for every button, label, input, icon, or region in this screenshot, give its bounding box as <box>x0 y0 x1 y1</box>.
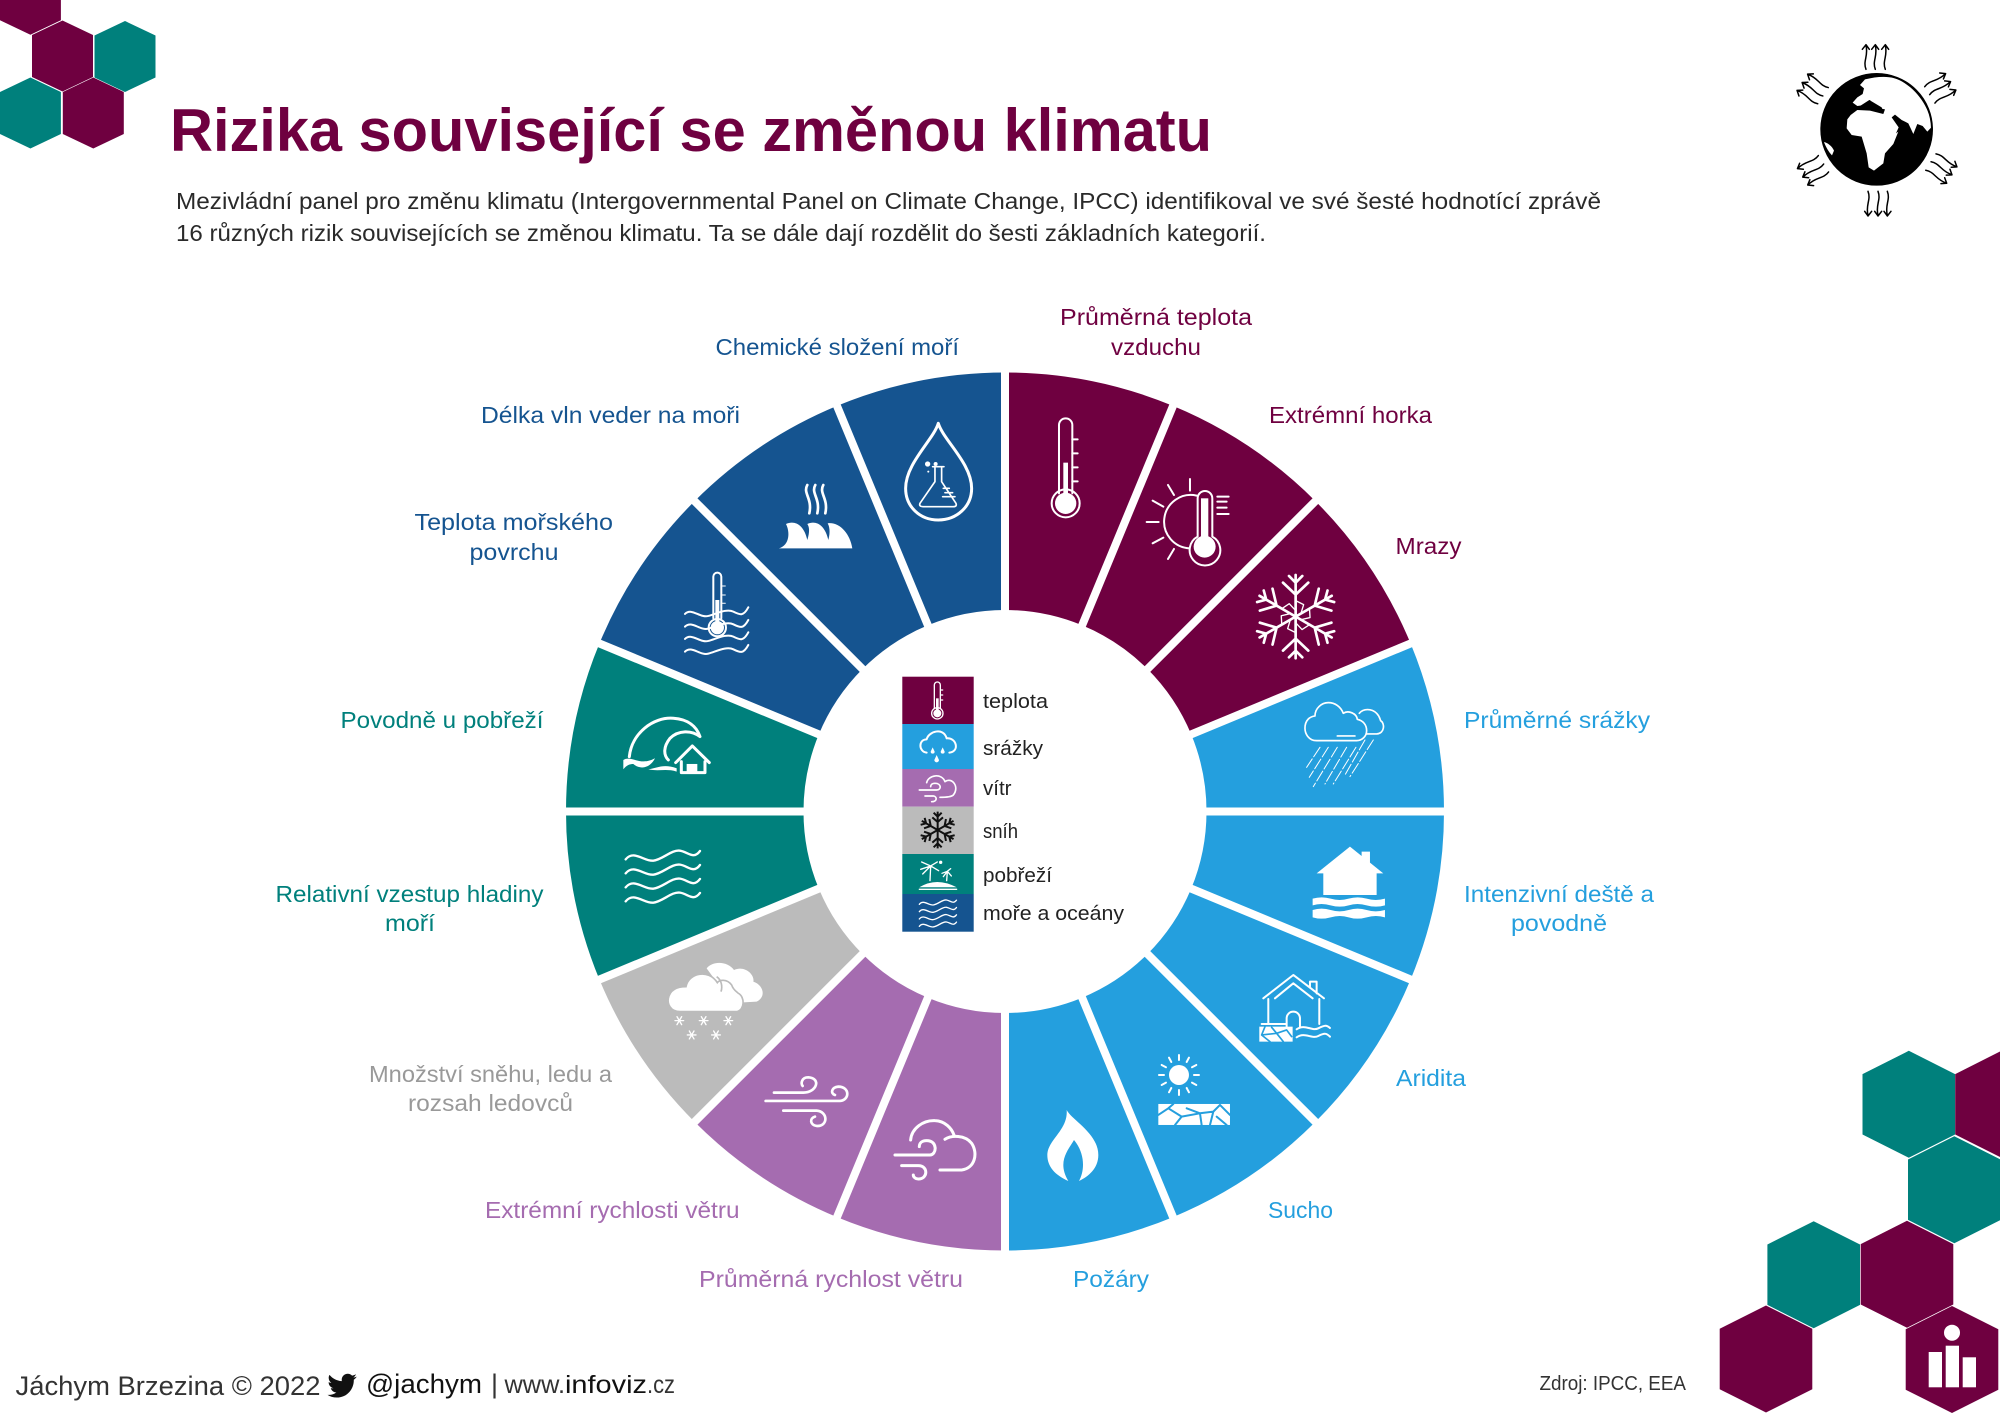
icon: twitter bird <box>328 1374 357 1398</box>
legend row: moře a oceány: moře a oceány <box>983 903 1124 925</box>
label: průměrná teplota vzduchu: vzduchu <box>1111 334 1201 360</box>
legend row: pobřeží: pobřeží <box>983 865 1052 887</box>
segment: aridita <box>1148 889 1411 1122</box>
label: průměrná teplota vzduchu <box>1060 304 1252 360</box>
legend row: vítr <box>902 769 1012 807</box>
label: mrazy: Mrazy <box>1396 533 1462 559</box>
segment: extrémní horka <box>1082 406 1315 669</box>
label: množství sněhu, ledu a rozsah ledovců <box>369 1061 612 1116</box>
icon: infoviz logo <box>1929 1325 1976 1387</box>
icon: sun over cracked soil <box>1158 1055 1230 1125</box>
icon: wind <box>766 1077 847 1126</box>
footer credits: Jáchym Brzezina © 2022 <box>16 1371 320 1401</box>
footer credits: www. <box>503 1371 565 1399</box>
label: teplota mořského povrchu <box>414 509 613 565</box>
legend row: sníh <box>902 807 1018 854</box>
label: množství sněhu, ledu a rozsah ledovců: rozsah ledovců <box>408 1090 573 1116</box>
icon: snow cloud <box>668 963 763 1039</box>
segment: množství sněhu, ledu a rozsah ledovců <box>599 889 862 1122</box>
label: teplota mořského povrchu: povrchu <box>470 539 558 565</box>
icon: flooded house <box>1313 847 1385 919</box>
intro text <box>176 188 1601 246</box>
label: průměrná teplota vzduchu: Průměrná teplota <box>1060 304 1252 330</box>
label: relativní vzestup hladiny moří: moří <box>385 910 436 936</box>
label: relativní vzestup hladiny moří <box>276 881 544 936</box>
label: sucho: Sucho <box>1268 1197 1333 1223</box>
icon: thermometer <box>1052 418 1080 517</box>
legend row: srážky: srážky <box>983 738 1043 760</box>
segment: teplota mořského povrchu <box>599 501 862 734</box>
hexagon cluster: top left <box>0 0 156 149</box>
segment: povodně u pobřeží <box>566 644 819 812</box>
risk wheel <box>560 366 1450 1257</box>
icon: thermometer in water <box>685 573 748 654</box>
segment: sucho <box>1082 954 1315 1217</box>
icon: tsunami and house <box>623 718 709 773</box>
footer credits: .cz <box>647 1371 675 1399</box>
title: Rizika související se změnou klimatu <box>170 97 1212 164</box>
source note: Zdroj: IPCC, EEA <box>1540 1373 1687 1395</box>
legend <box>902 677 1124 932</box>
label: průměrná rychlost větru: Průměrná rychlost větru <box>699 1266 963 1292</box>
icon: flame <box>1047 1110 1098 1181</box>
segment: požáry <box>1005 998 1173 1250</box>
legend row: teplota: teplota <box>983 691 1049 713</box>
segment: extrémní rychlosti větru <box>695 954 928 1217</box>
segment: intenzivní deště a povodně <box>1191 812 1444 980</box>
icon: snowflake <box>1253 575 1338 658</box>
label: chemické složení moří: Chemické složení moří <box>716 334 960 360</box>
label: požáry: Požáry <box>1073 1266 1150 1292</box>
icon: wind and cloud <box>895 1121 975 1179</box>
label: intenzivní deště a povodně <box>1464 881 1654 936</box>
legend row: sníh: sníh <box>983 821 1018 843</box>
icon: warming globe <box>1795 45 1959 216</box>
footer credits <box>16 1369 675 1401</box>
label: aridita: Aridita <box>1396 1065 1466 1091</box>
hexagon cluster: bottom right <box>1720 1051 2000 1413</box>
legend row: pobřeží <box>902 854 1052 894</box>
legend row: teplota <box>902 677 1049 724</box>
icon: sun with thermometer <box>1147 479 1229 565</box>
label: relativní vzestup hladiny moří: Relativní vzestup hladiny <box>276 881 544 907</box>
intro text: 16 různých rizik souvisejících se změnou klimatu. Ta se dále dají rozdělit do šesti základních kategorií. <box>176 220 1266 246</box>
icon: rain clouds <box>1305 703 1383 787</box>
segment: chemické složení moří <box>837 372 1005 625</box>
label: intenzivní deště a povodně: povodně <box>1511 910 1607 936</box>
segment: mrazy <box>1148 501 1411 734</box>
legend row: srážky <box>902 724 1043 769</box>
label: povodně u pobřeží: Povodně u pobřeží <box>340 707 544 733</box>
label: délka vln veder na moři: Délka vln veder na moři <box>481 402 740 428</box>
footer credits: | <box>491 1369 498 1399</box>
wheel labels <box>276 304 1654 1292</box>
segment: délka vln veder na moři <box>695 406 928 669</box>
label: teplota mořského povrchu: Teplota mořského <box>414 509 613 535</box>
intro text: Mezivládní panel pro změnu klimatu (Intergovernmental Panel on Climate Change, IPCC) identifikoval ve své šesté hodnotící zprávě <box>176 188 1601 214</box>
label: extrémní rychlosti větru: Extrémní rychlosti větru <box>485 1197 740 1223</box>
icon: droplet with flask <box>906 423 972 520</box>
label: průměrné srážky: Průměrné srážky <box>1464 707 1651 733</box>
label: množství sněhu, ledu a rozsah ledovců: Množství sněhu, ledu a <box>369 1061 612 1087</box>
legend row: vítr: vítr <box>983 778 1012 800</box>
segment: průměrné srážky <box>1191 644 1444 812</box>
segment: průměrná rychlost větru <box>837 998 1005 1250</box>
icon: waves <box>626 851 700 903</box>
footer credits: @jachym <box>366 1369 482 1399</box>
legend row: moře a oceány <box>902 894 1124 932</box>
segment: relativní vzestup hladiny moří <box>566 812 819 980</box>
label: extrémní horka: Extrémní horka <box>1269 402 1432 428</box>
icon: house in dry land <box>1259 975 1330 1042</box>
icon: heat over waves <box>779 485 852 548</box>
footer credits: infoviz <box>565 1371 647 1399</box>
segment: průměrná teplota vzduchu <box>1005 372 1173 625</box>
label: intenzivní deště a povodně: Intenzivní deště a <box>1464 881 1654 907</box>
